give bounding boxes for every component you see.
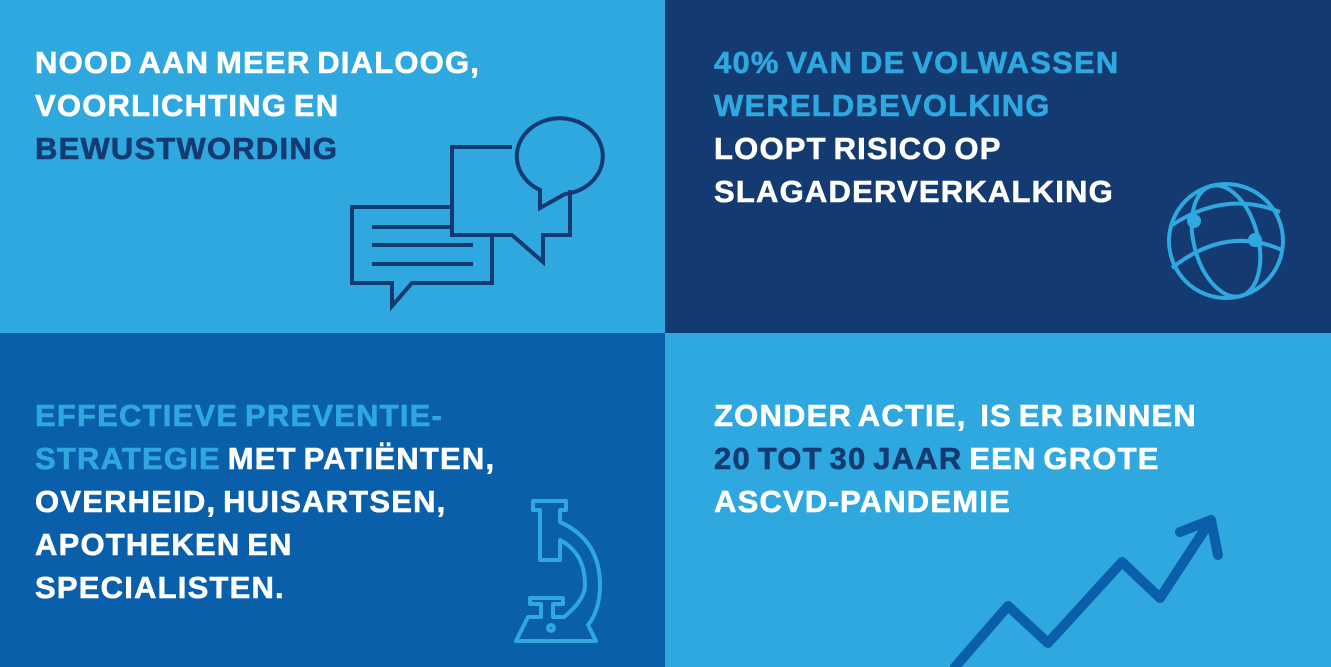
heading: statistic: [714, 45, 1119, 209]
icon: speech bubbles: [352, 118, 603, 306]
heading: pandemic: ASCVD-PANDEMIE: [714, 484, 1011, 519]
heading: dialogue: NOOD AAN MEER DIALOOG,: [35, 45, 480, 80]
heading: dialogue: VOORLICHTING EN: [35, 88, 339, 123]
panel: bottom-right pandemic: [665, 333, 1331, 667]
heading: prevention: APOTHEKEN EN: [35, 527, 293, 562]
heading: dialogue: [34, 45, 480, 166]
heading: prevention: OVERHEID, HUISARTSEN,: [35, 484, 446, 519]
panel: top-right statistic: [665, 0, 1331, 334]
heading: statistic: 40% VAN DE VOLWASSEN: [714, 45, 1119, 80]
heading: pandemic: 20 TOT 30 JAAR EEN GROTE: [714, 441, 1160, 476]
heading: pandemic: [714, 398, 1197, 519]
heading: statistic: LOOPT RISICO OP: [714, 131, 1002, 166]
heading: statistic: SLAGADERVERKALKING: [714, 174, 1114, 209]
heading: prevention: EFFECTIEVE PREVENTIE-: [35, 398, 443, 433]
heading: statistic: WERELDBEVOLKING: [714, 88, 1051, 123]
icon: globe: [1169, 178, 1283, 304]
icon: microscope: [516, 501, 600, 641]
panel: bottom-left prevention: [0, 333, 666, 667]
heading: prevention: SPECIALISTEN.: [35, 570, 285, 605]
heading: prevention: [35, 398, 495, 605]
heading: pandemic: ZONDER ACTIE, IS ER BINNEN: [714, 398, 1197, 433]
icon: rising arrow: [955, 520, 1218, 667]
heading: dialogue: BEWUSTWORDING: [35, 131, 338, 166]
heading: prevention: STRATEGIE MET PATIËNTEN,: [35, 441, 495, 476]
panel: top-left dialogue: [0, 0, 666, 334]
